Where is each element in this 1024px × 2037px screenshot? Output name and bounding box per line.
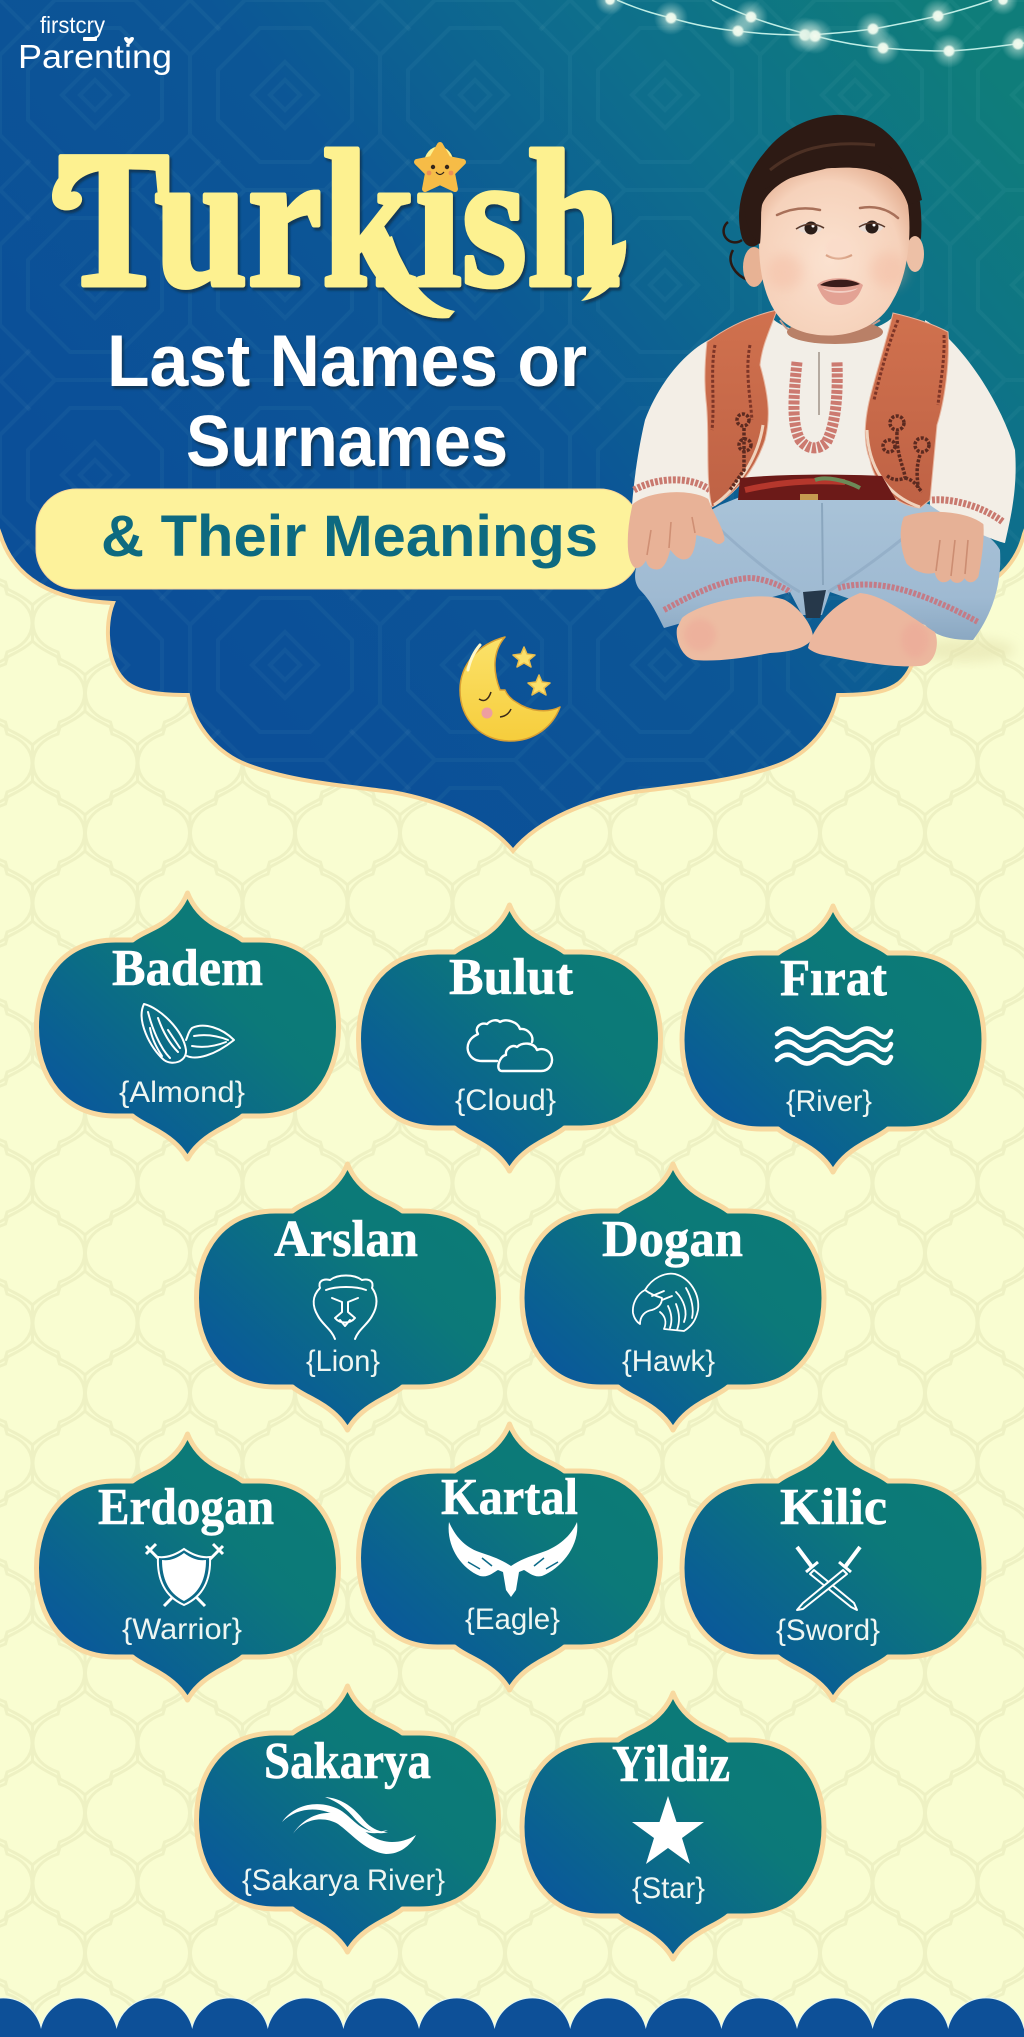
card: Arslan	[196, 1164, 498, 1430]
icon: lion	[314, 1276, 376, 1339]
icon: waves	[777, 1028, 891, 1064]
head	[724, 115, 924, 344]
icon: smiling star	[417, 145, 463, 189]
name: Sakarya: Sakarya	[264, 1733, 431, 1790]
meaning: Cloud: {Cloud}	[455, 1084, 556, 1117]
meaning: River: {River}	[786, 1085, 872, 1118]
card: Kilic	[682, 1434, 984, 1700]
subtitle pill: & Their Meanings	[36, 489, 640, 589]
logo: firstcry parenting	[18, 12, 172, 75]
meaning: Hawk: {Hawk}	[622, 1345, 715, 1378]
icon: hawk	[633, 1274, 698, 1331]
icon: crossed swords	[797, 1547, 860, 1610]
heading: Last Names or Surnames: Last Names or	[107, 321, 587, 402]
baby illustration	[629, 115, 1016, 666]
icon: shield and swords	[146, 1544, 223, 1606]
pants	[635, 497, 1000, 640]
name: Kartal: Kartal	[441, 1469, 578, 1526]
card: Dogan	[522, 1164, 824, 1430]
logo: firstcry parenting: Parenting	[18, 38, 172, 75]
card: Badem	[36, 893, 338, 1159]
meaning: Lion: {Lion}	[306, 1345, 380, 1378]
name: Arslan: Arslan	[274, 1211, 418, 1268]
name: Bulut: Bulut	[449, 949, 574, 1006]
feet	[677, 593, 937, 666]
subtitle pill: & Their Meanings: & Their Meanings	[101, 504, 598, 569]
heading: Last Names or Surnames	[107, 321, 587, 482]
icon: crescent moon with stars	[460, 637, 560, 741]
card: Bulut	[358, 905, 660, 1171]
icon: almonds	[142, 1004, 234, 1063]
logo: firstcry parenting: firstcry	[40, 12, 105, 38]
hands	[629, 494, 982, 581]
card: Kartal	[358, 1424, 660, 1690]
name: Erdogan: Erdogan	[98, 1479, 274, 1536]
name: Badem: Badem	[112, 940, 263, 997]
meaning: Warrior: {Warrior}	[122, 1613, 242, 1646]
name: Kilic: Kilic	[780, 1479, 887, 1536]
footer scallops	[0, 1998, 1024, 2037]
name: Yildiz: Yildiz	[612, 1736, 730, 1793]
card: Sakarya	[196, 1686, 498, 1952]
card: Erdogan	[36, 1434, 338, 1700]
icon: eagle	[449, 1522, 577, 1597]
string lights	[595, 0, 1024, 68]
heading: Last Names or Surnames: Surnames	[186, 402, 508, 482]
header panel	[0, 0, 1024, 851]
title: Turkish: Turkish	[58, 111, 620, 328]
name: Dogan: Dogan	[602, 1211, 743, 1268]
meaning: Almond: {Almond}	[119, 1076, 245, 1109]
meaning: Sakarya River: {Sakarya River}	[242, 1864, 445, 1897]
name: Firat: Fırat	[780, 950, 888, 1007]
icon: cloud	[468, 1020, 552, 1071]
meaning: Sword: {Sword}	[776, 1614, 880, 1647]
vest	[705, 310, 948, 508]
meaning: Eagle: {Eagle}	[465, 1603, 560, 1636]
card: Firat	[682, 906, 984, 1172]
sash	[738, 475, 896, 500]
icon: star	[632, 1796, 704, 1864]
meaning: Star: {Star}	[632, 1872, 705, 1905]
icon: swooshes	[282, 1797, 416, 1854]
card: Yildiz	[522, 1693, 824, 1959]
shirt	[632, 316, 1016, 543]
